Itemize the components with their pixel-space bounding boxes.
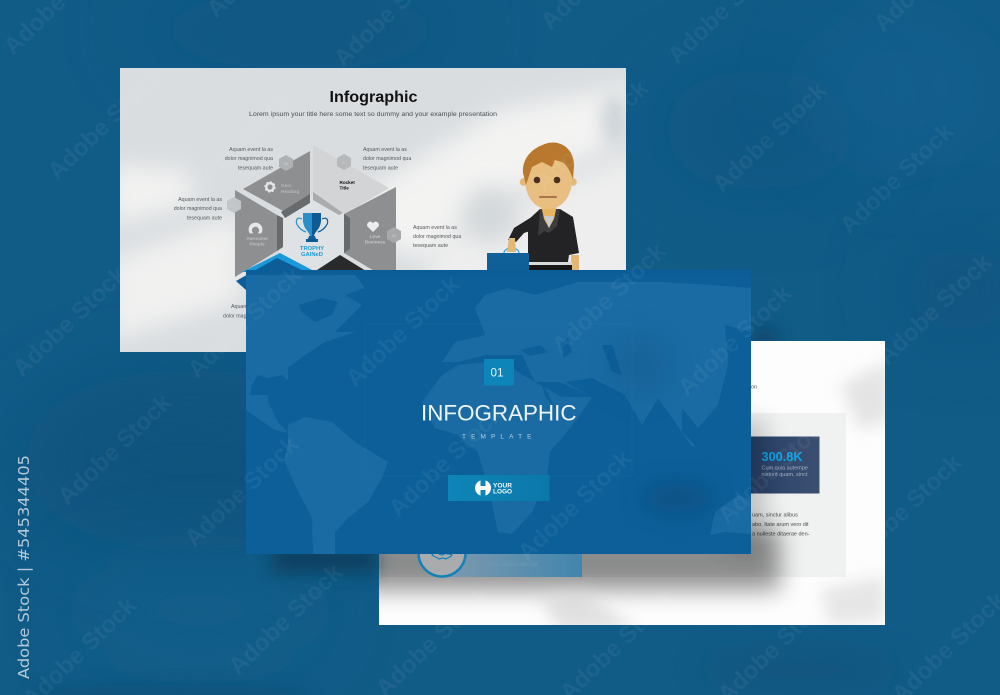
watermarks: Adobe Stock	[8, 260, 132, 382]
body text: uam, sinctur alibus	[752, 512, 798, 518]
stat caption	[762, 466, 808, 478]
world map	[246, 272, 751, 555]
watermarks: Adobe Stock	[224, 558, 348, 680]
center hexagon	[279, 196, 345, 272]
hex badges	[227, 154, 401, 243]
logo box	[448, 475, 550, 501]
text block: upper left	[225, 147, 273, 172]
jacket	[528, 209, 579, 262]
briefcase	[487, 253, 529, 270]
number badge: 01	[490, 366, 504, 380]
shadows on slide	[246, 270, 751, 512]
stat card	[751, 436, 820, 494]
segment: rocket title: Rocket	[340, 180, 355, 185]
arm and hand	[508, 218, 530, 242]
watermarks: Adobe Stock	[835, 117, 959, 239]
hex badges: 01	[232, 203, 237, 208]
eurasia	[442, 282, 751, 447]
watermarks: Adobe Stock	[384, 400, 508, 522]
text block: upper right: Aquam event la as	[363, 147, 407, 153]
text block: right: tesequam aute	[413, 243, 448, 249]
segment: rocket title	[313, 145, 389, 215]
text block: left: Aquam event la as	[178, 197, 222, 203]
icon: trophy	[296, 213, 328, 242]
body text	[751, 384, 810, 538]
heading: Infographic	[330, 89, 418, 106]
watermarks: Adobe Stock	[53, 388, 177, 510]
belt and trousers	[528, 262, 572, 265]
segment: awesome people: Awesome	[246, 236, 268, 241]
logo text: YOUR	[493, 482, 512, 490]
thin frame	[365, 324, 632, 476]
shadow of front slide on wall	[272, 545, 378, 573]
number badge	[484, 359, 514, 386]
watermarks: Adobe Stock	[547, 237, 671, 359]
text block: lower left (clipped)	[223, 304, 246, 318]
text block: upper left: Aquam event la as	[229, 147, 273, 153]
australia	[710, 495, 751, 535]
subtitle: Lorem ipsum your title here some text so dummy and your example presentation	[249, 111, 497, 118]
watermarks: Adobe Stock	[341, 270, 465, 392]
ears	[520, 178, 526, 186]
title: INFOGRAPHIC	[421, 400, 577, 426]
watermarks: Adobe Stock	[713, 407, 837, 529]
text block: lower left (clipped): dolor magnimod qua	[223, 314, 271, 320]
watermarks: Adobe Stock	[873, 248, 997, 370]
text block: upper right	[363, 147, 411, 172]
africa	[422, 362, 592, 534]
watermarks: Adobe Stock	[173, 86, 297, 208]
watermarks: Adobe Stock	[386, 68, 510, 190]
label: trophy gained: GAINeD	[301, 252, 323, 258]
text block: upper right: dolor magnimod qua	[363, 156, 411, 162]
segment: love business: Business	[365, 240, 386, 244]
watermarks: Adobe Stock	[843, 448, 967, 570]
illustration: businessman	[487, 142, 579, 273]
segment: rocket title: Title	[340, 186, 349, 190]
segment: awesome people	[235, 190, 283, 277]
hex badges: 07	[342, 160, 347, 165]
stat caption: Cum quia autempe	[762, 466, 808, 472]
text block: right: dolor magnimod qua	[413, 234, 461, 240]
content panel	[381, 413, 846, 577]
text block: right: Aquam event la as	[413, 225, 457, 231]
logo text: LOGO	[493, 488, 512, 496]
body text: on	[751, 384, 757, 390]
subtitle: TEMPLATE	[462, 434, 532, 440]
segment: love business	[344, 187, 396, 272]
hex badges: 02	[392, 233, 397, 238]
text block: right	[413, 225, 461, 249]
stock id label: Adobe Stock | #545344405	[15, 455, 33, 679]
watermarks: Adobe Stock	[708, 76, 832, 198]
watermarks: Adobe Stock	[43, 63, 167, 185]
slide: title cover (front)	[246, 270, 751, 555]
slide: infographic (back left)	[110, 68, 640, 352]
neck and shirt	[542, 207, 556, 228]
segment: love business: Love	[370, 234, 381, 239]
cast shadows	[350, 360, 890, 630]
text block: upper left: tesequam aute	[238, 166, 273, 172]
logo text	[493, 482, 512, 496]
segment: gear heading: Gear	[281, 183, 292, 188]
label: trophy gained	[300, 246, 324, 256]
segment: gear heading	[243, 151, 310, 218]
stat value: 300.8K	[762, 450, 802, 464]
watermarks: Adobe Stock	[513, 444, 637, 566]
icon: logo mark	[475, 479, 491, 497]
label: trophy gained: TROPHY	[300, 246, 324, 252]
paper light patches	[110, 85, 640, 340]
hex badges: 06	[284, 161, 289, 166]
segment: blue	[236, 253, 314, 290]
text block: upper left: dolor magnimod qua	[225, 156, 273, 162]
hexagon diagram	[227, 145, 401, 290]
seas	[299, 298, 622, 412]
watermarks: Adobe Stock	[183, 261, 307, 383]
hair	[523, 142, 574, 185]
body text: abo. Itate arum vero dit	[752, 522, 809, 528]
slide: statistics (back right)	[350, 341, 890, 630]
south america	[285, 417, 388, 555]
text block: left: tesequam aute	[187, 216, 222, 222]
text block: left	[174, 197, 222, 222]
briefcase handle	[504, 248, 519, 253]
segment: black	[317, 255, 364, 270]
text block: lower left (clipped): Aquam event la as	[231, 304, 275, 310]
text block: upper right: tesequam aute	[363, 166, 398, 172]
north america	[246, 272, 365, 433]
face	[525, 159, 572, 209]
watermarks: Adobe Stock	[673, 279, 797, 401]
eyes	[534, 177, 540, 183]
text block: left: dolor magnimod qua	[174, 206, 222, 212]
segment: gear heading: Heading	[281, 189, 299, 194]
mouth	[539, 196, 557, 198]
body text: a nulleste ditaerae den-	[752, 532, 810, 538]
blue bar with circle icon: sinctur alibus nulle bus	[485, 562, 538, 568]
watermarks: Adobe Stock	[180, 430, 304, 552]
watermarks: Adobe Stock	[530, 74, 654, 196]
blue bar with circle icon	[417, 554, 582, 578]
stat caption: nisturit quam, sinct	[762, 472, 808, 478]
segment: awesome people: People	[249, 242, 265, 246]
